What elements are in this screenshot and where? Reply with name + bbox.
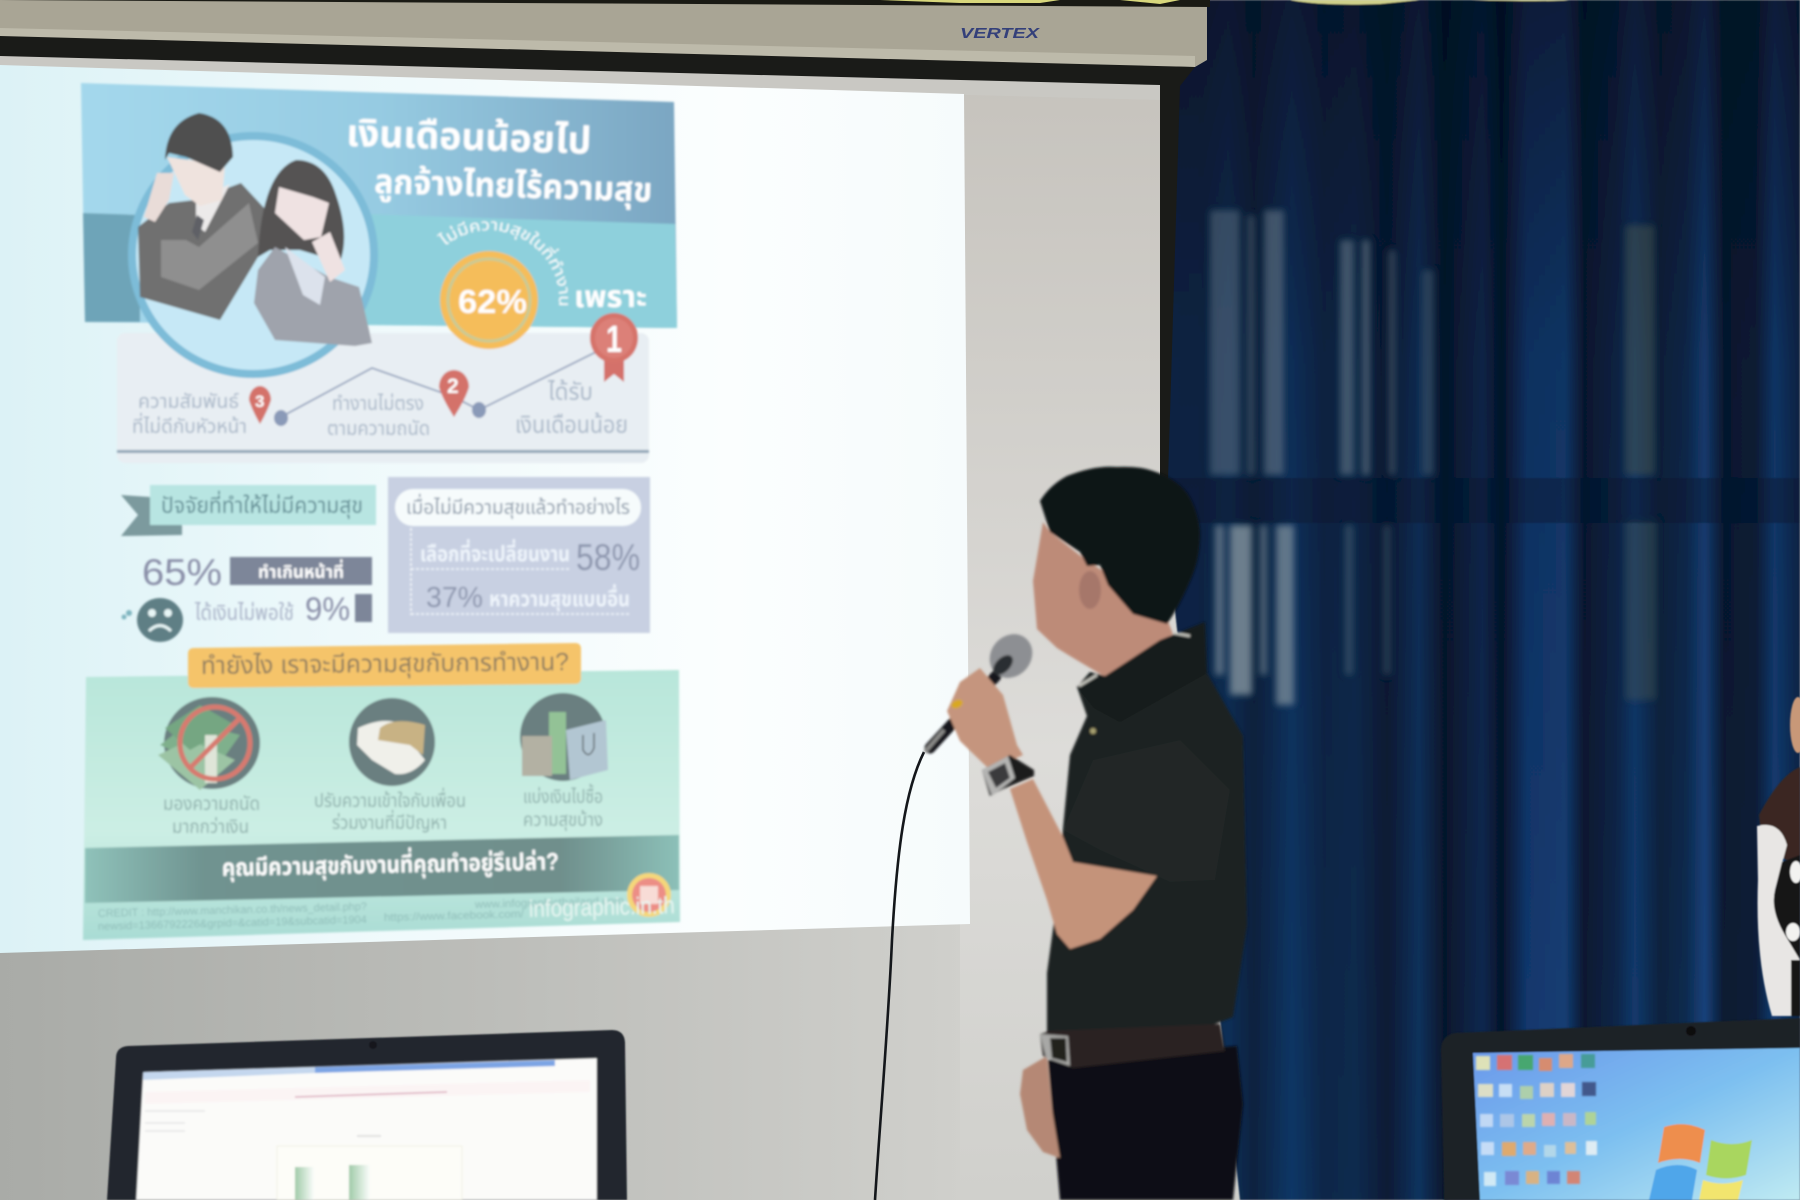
forearm bbox=[1010, 779, 1157, 949]
lower hand bbox=[1020, 1056, 1060, 1158]
face and neck bbox=[1033, 522, 1173, 678]
collar bbox=[1077, 622, 1207, 734]
logo badge bbox=[627, 873, 671, 917]
tip captions: ร่วมงานที่มีปัญหา bbox=[332, 809, 447, 834]
credits: CREDIT : http://www.manchikan.co.th/news_detail.php? bbox=[98, 901, 367, 920]
because label: เพราะ bbox=[574, 281, 647, 314]
pin: rank 3: 3 bbox=[255, 392, 264, 411]
left laptop bbox=[107, 1030, 627, 1200]
reason 3 text bbox=[132, 391, 247, 438]
panel: what people do when unhappy: เลือกที่จะเปลี่ยนงาน bbox=[420, 539, 570, 566]
VERTEX logo: VERTEX bbox=[960, 26, 1041, 42]
62% badge: 62% bbox=[458, 283, 527, 320]
tip captions: ความสุขบ้าง bbox=[523, 808, 603, 831]
panel: how to be happy bbox=[83, 670, 680, 940]
tip captions: แบ่งเงินไปซื้อ bbox=[523, 783, 603, 808]
panel: what people do when unhappy: 37% bbox=[426, 582, 483, 614]
ear bbox=[1079, 571, 1101, 609]
orange question label bbox=[188, 643, 581, 688]
steps panel background bbox=[117, 333, 649, 463]
wristwatch bbox=[982, 755, 1034, 796]
windows logo bbox=[1649, 1124, 1752, 1200]
reason 2 text: ตามความถนัด bbox=[327, 418, 430, 440]
desktop wallpaper bbox=[1473, 1048, 1800, 1200]
orange question label: ทำยังไง เราจะมีความสุขกับการทำงาน? bbox=[201, 648, 569, 681]
62% badge: ไม่มีความสุขในที่ทำงาน bbox=[436, 220, 570, 306]
curtain rail fringe bbox=[1205, 0, 1570, 4]
node dots bbox=[274, 402, 486, 426]
tip captions: มองความถนัด bbox=[163, 794, 260, 815]
credits bbox=[98, 895, 624, 933]
projector screen housing bbox=[0, 0, 1210, 480]
stat: 9% not enough money bbox=[194, 591, 372, 627]
black screen border bbox=[0, 36, 1195, 480]
pin: rank 2 bbox=[439, 370, 469, 417]
reason 2 text bbox=[327, 392, 430, 440]
illustration: two unhappy workers in circle bbox=[132, 113, 374, 374]
hair bbox=[1040, 467, 1200, 624]
62% badge bbox=[436, 220, 570, 350]
panel: what people do when unhappy: หาความสุขแบบอื่น bbox=[489, 584, 630, 612]
projected infographic bbox=[80, 82, 682, 941]
laptop screen with browser window bbox=[136, 1058, 597, 1200]
tip captions: มากกว่าเงิน bbox=[172, 815, 249, 838]
stat: 9% not enough money: 9% bbox=[305, 591, 350, 627]
reason 1 text: ได้รับ bbox=[547, 379, 593, 406]
reason 1 text: เงินเดือนน้อย bbox=[515, 412, 628, 439]
icon: no money bbox=[158, 697, 260, 790]
reason 3 text: ที่ไม่ดีกับหัวหน้า bbox=[132, 412, 247, 438]
right laptop bbox=[1441, 1018, 1800, 1200]
icon: sad face bbox=[122, 598, 183, 642]
hand holding microphone bbox=[947, 668, 1023, 770]
stat: 65% overwork bbox=[142, 552, 372, 593]
microphone bbox=[925, 626, 1041, 752]
ribbon heading: factors bbox=[121, 485, 376, 536]
stat: 65% overwork: 65% bbox=[142, 552, 222, 593]
pin: rank 3 bbox=[249, 386, 271, 424]
stat: 65% overwork: ทำเกินหน้าที่ bbox=[258, 559, 344, 582]
watermark: infographic.in.th bbox=[528, 892, 675, 923]
curtain bbox=[1165, 0, 1800, 1200]
icon: shopping bags bbox=[520, 693, 608, 781]
stat: 9% not enough money: ได้เงินไม่พอใช้ bbox=[194, 601, 294, 625]
tip captions: ปรับความเข้าใจกับเพื่อน bbox=[314, 787, 466, 812]
ring bbox=[950, 698, 964, 710]
ranking trend line bbox=[281, 350, 600, 417]
projected light area bbox=[0, 65, 970, 953]
trousers bbox=[1048, 1046, 1243, 1200]
medal: rank 1: 1 bbox=[606, 319, 622, 361]
sleeve bbox=[1063, 740, 1230, 882]
header panel bbox=[81, 83, 677, 328]
woman at right edge bbox=[1757, 697, 1800, 1016]
panel: what people do when unhappy: เมื่อไม่มีความสุขแล้วทำอย่างไร bbox=[406, 493, 630, 519]
title bbox=[346, 113, 653, 211]
panel: what people do when unhappy bbox=[388, 477, 650, 633]
belt bbox=[1040, 1024, 1225, 1068]
credits: newsid=1366792226&grpid=&catid=19&subcatid=1904 bbox=[98, 914, 367, 933]
pin: rank 2: 2 bbox=[447, 375, 459, 398]
medal: rank 1 bbox=[590, 313, 638, 382]
title: ลูกจ้างไทยไร้ความสุข bbox=[374, 163, 653, 211]
closing question band bbox=[85, 835, 679, 903]
reason 3 text: ความสัมพันธ์ bbox=[138, 391, 239, 413]
microphone cable bbox=[875, 752, 924, 1200]
reason 1 text bbox=[515, 379, 628, 439]
shirt bbox=[1047, 624, 1247, 1040]
reason 2 text: ทำงานไม่ตรง bbox=[332, 392, 424, 415]
title: เงินเดือนน้อยไป bbox=[346, 113, 592, 163]
ribbon heading: factors: ปัจจัยที่ทำให้ไม่มีความสุข bbox=[161, 490, 363, 519]
panel: what people do when unhappy: 58% bbox=[576, 537, 640, 578]
credits: https://www.facebook.com/ bbox=[384, 908, 525, 924]
icon: handshake bbox=[349, 698, 435, 786]
sheer window light bbox=[1210, 210, 1657, 705]
tip captions bbox=[163, 783, 603, 838]
presenter bbox=[925, 467, 1247, 1200]
closing question band: คุณมีความสุขกับงานที่คุณทำอยู่รึเปล่า? bbox=[222, 844, 559, 883]
credits: www.infographicthailand.com bbox=[474, 895, 624, 911]
desktop icons bbox=[1476, 1054, 1597, 1186]
